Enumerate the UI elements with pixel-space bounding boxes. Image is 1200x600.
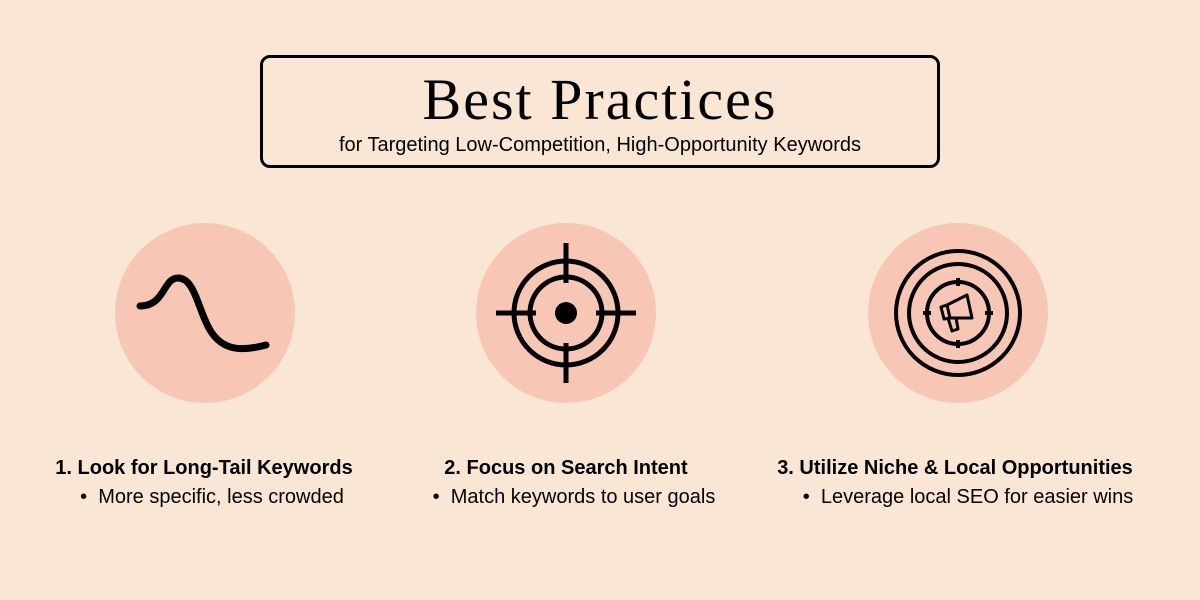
column 2 heading: 2. Focus on Search Intent (444, 457, 688, 479)
column 3 bullet: • Leverage local SEO for easier wins (803, 486, 1133, 508)
column 2 bullet: • Match keywords to user goals (433, 486, 715, 508)
title box (260, 55, 940, 168)
icon: curve (115, 223, 295, 403)
icon: target (476, 223, 656, 403)
column 1 heading: 1. Look for Long-Tail Keywords (55, 457, 353, 479)
subtitle: for Targeting Low-Competition, High-Opportunity Keywords (339, 134, 861, 156)
icon: megaphone target (868, 223, 1048, 403)
column 3 heading: 3. Utilize Niche & Local Opportunities (777, 457, 1133, 479)
column 1 bullet: • More specific, less crowded (80, 486, 344, 508)
title: Best Practices (423, 67, 777, 132)
